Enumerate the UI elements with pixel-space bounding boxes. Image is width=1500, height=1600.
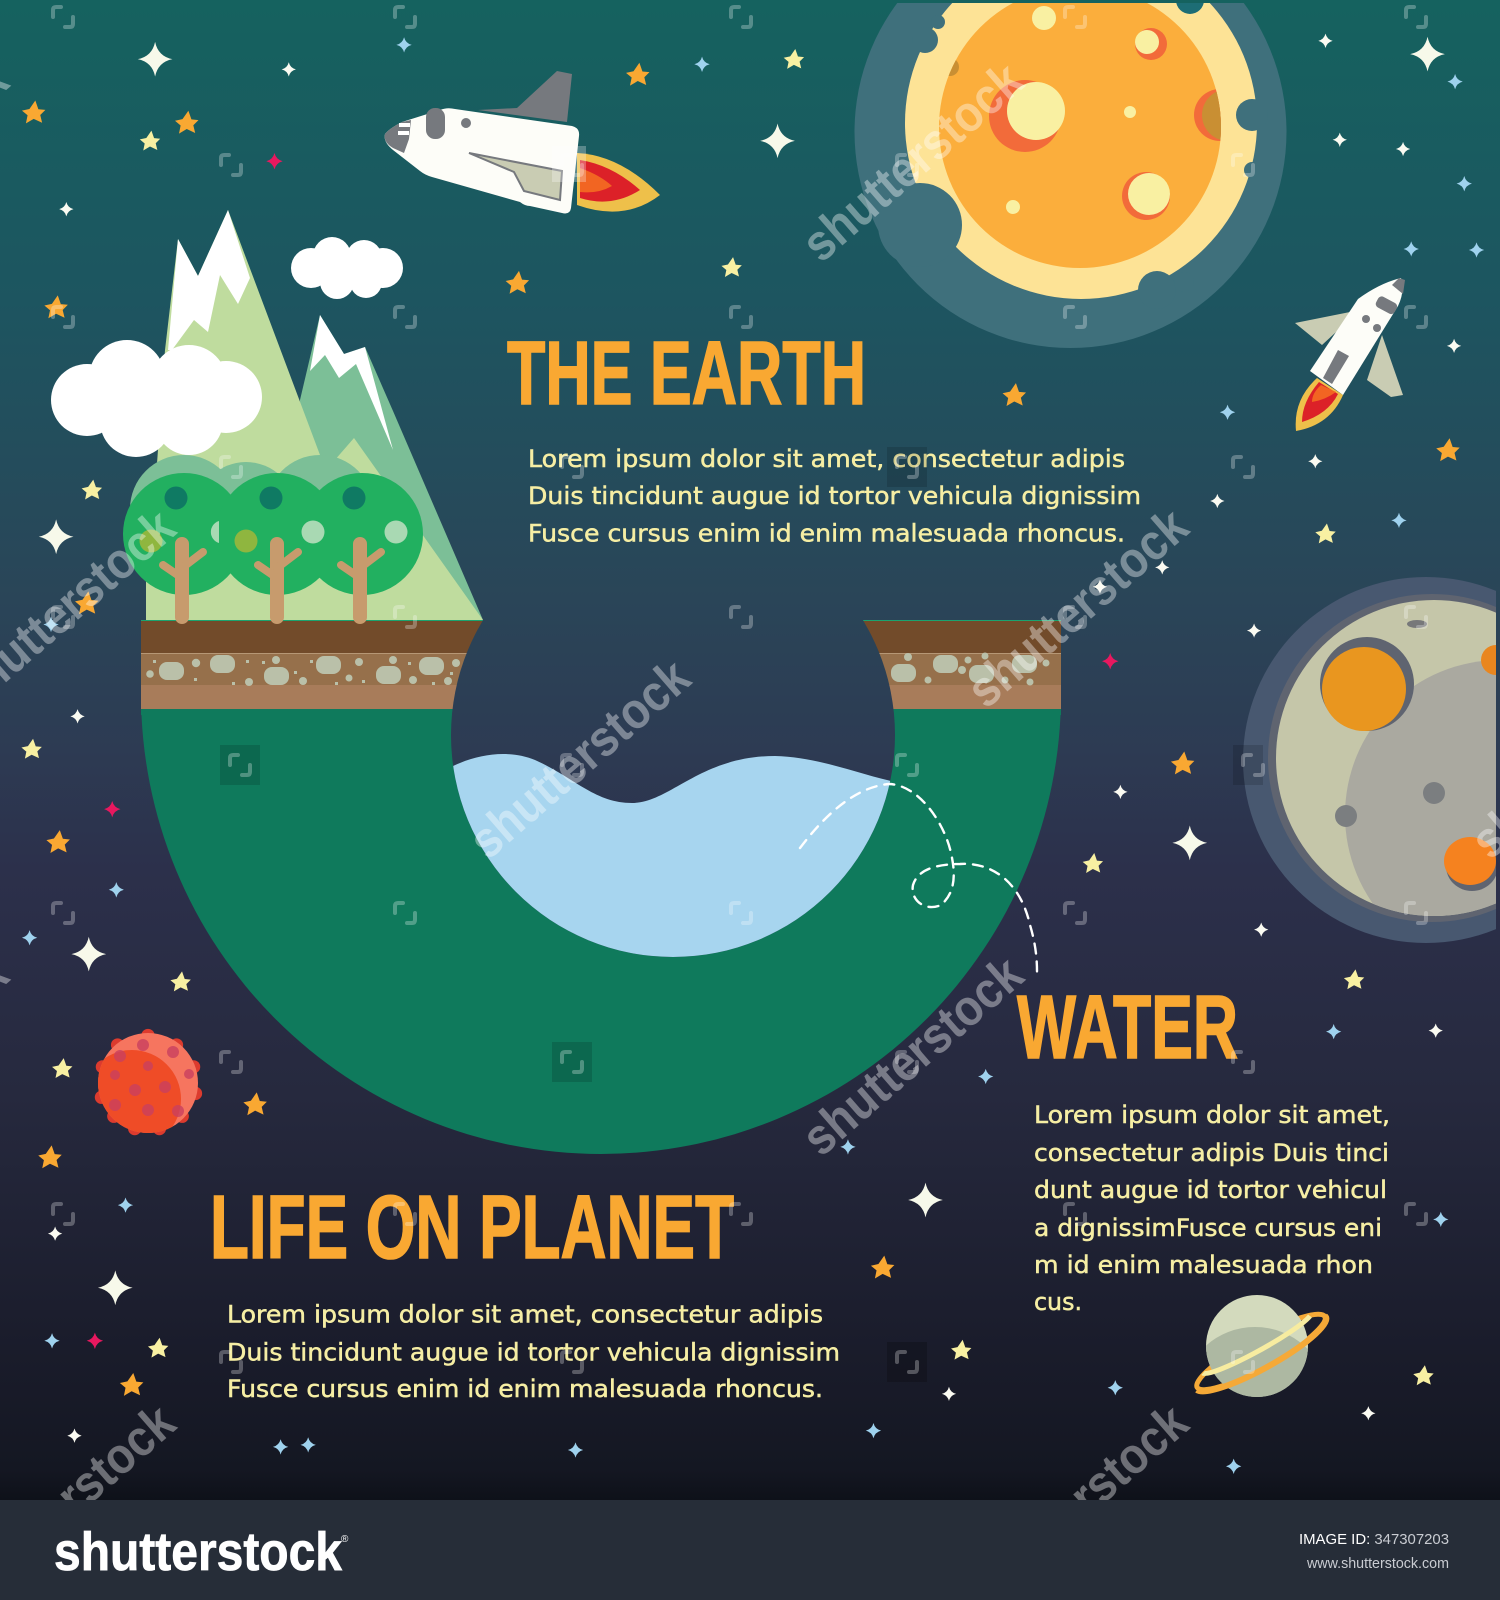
tree trunks <box>163 544 381 617</box>
registered mark: ® <box>341 1534 349 1545</box>
body text: water: dunt augue id tortor vehicul <box>1034 1176 1387 1204</box>
body text: life on planet <box>227 1300 840 1403</box>
diagonal watermarks: shutterstock <box>956 496 1199 718</box>
mountains and trees <box>123 210 483 620</box>
body text: water: m id enim malesuada rhon <box>1034 1251 1373 1279</box>
body text: the earth: Duis tincidunt augue id tortor vehicula dignissim <box>528 482 1141 510</box>
orange stars <box>22 63 1460 1396</box>
body text: the earth: Lorem ipsum dolor sit amet, consectetur adipis <box>528 445 1125 473</box>
title: water: WATER <box>1017 978 1238 1078</box>
title: the earth: THE EARTH <box>507 324 866 424</box>
pink sparkles <box>87 153 1118 1349</box>
footer logo: shutterstock <box>54 1522 343 1582</box>
image id: IMAGE ID: 347307203 <box>1299 1531 1449 1548</box>
large white sparkles <box>39 37 1445 1305</box>
red planet <box>94 1028 202 1136</box>
dashed trail <box>800 784 1037 972</box>
tree canopy backdrop <box>130 455 374 563</box>
diagonal watermarks: shutterstock <box>791 944 1034 1166</box>
small cloud <box>291 237 403 299</box>
space shuttle right <box>1295 278 1405 431</box>
large cloud <box>51 340 262 457</box>
sun planet <box>854 0 1286 348</box>
tree canopies <box>123 473 423 595</box>
earth ring body <box>141 619 1061 1154</box>
mountain back right <box>300 315 483 620</box>
diagonal watermarks: shutterstock <box>458 647 701 869</box>
mountain big <box>146 210 320 620</box>
body text: water: consectetur adipis Duis tinci <box>1034 1139 1389 1167</box>
tree fruits <box>140 486 408 552</box>
watermark icons <box>53 7 1426 1382</box>
earth cross section <box>141 619 1061 1154</box>
body text: life on planet: Lorem ipsum dolor sit amet, consectetur adipis <box>227 1300 823 1328</box>
body text: life on planet: Duis tincidunt augue id tortor vehicula dignissim <box>227 1338 840 1366</box>
yellow stars <box>21 49 1434 1385</box>
body text: the earth: Fusce cursus enim id enim malesuada rhoncus. <box>528 520 1125 548</box>
footer bar <box>0 1500 1500 1600</box>
diagonal watermarks: shutterstock <box>791 50 1034 272</box>
body text: water <box>1034 1101 1390 1316</box>
title: life on planet: LIFE ON PLANET <box>210 1178 734 1278</box>
foreground hill <box>146 438 483 620</box>
body text: life on planet: Fusce cursus enim id enim malesuada rhoncus. <box>227 1375 823 1403</box>
body text: water: cus. <box>1034 1288 1082 1316</box>
space shuttle left <box>385 71 660 213</box>
water <box>453 754 890 957</box>
website url: www.shutterstock.com <box>1306 1556 1449 1572</box>
body text: water: Lorem ipsum dolor sit amet, <box>1034 1101 1390 1129</box>
ringed planet <box>1194 1295 1330 1397</box>
body text: the earth <box>528 445 1141 548</box>
grey moon planet <box>1243 577 1500 970</box>
body text: water: a dignissimFusce cursus eni <box>1034 1214 1382 1242</box>
